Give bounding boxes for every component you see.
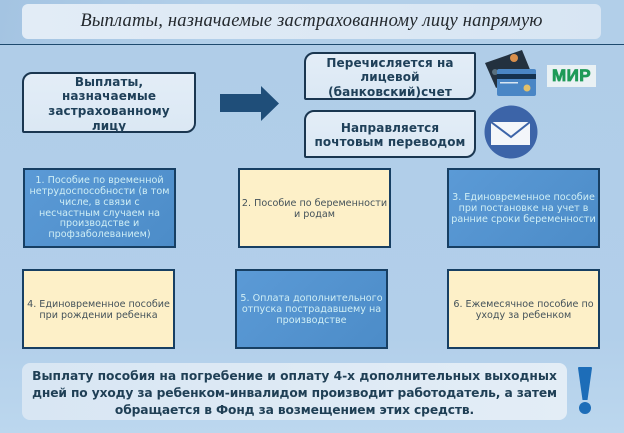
title panel: Выплаты, назначаемые застрахованному лицу напрямую — [80, 11, 543, 31]
left box: payments to insured — [22, 72, 196, 133]
icon: MIR logo — [547, 65, 596, 87]
box: bank account — [304, 52, 476, 100]
benefit 1: производстве и — [60, 218, 139, 229]
left box: payments to insured: лицу — [92, 119, 126, 133]
benefit 1: числе, в связи с — [59, 197, 140, 208]
benefit 6: 6. Ежемесячное пособие по — [453, 299, 594, 310]
benefit 6: уходу за ребенком — [476, 310, 571, 320]
icon: MIR logo: МИР — [552, 66, 591, 85]
benefit 5: отпуска пострадавшему на — [242, 304, 381, 315]
benefit 2: 2. Пособие по беременности — [242, 198, 387, 209]
benefit 4 — [22, 269, 175, 349]
benefit 1: несчастным случаем на — [39, 208, 160, 218]
bottom note panel: дней по уходу за ребенком-инвалидом производит работодатель, а затем — [32, 386, 557, 400]
arrow — [220, 86, 279, 121]
benefit 1: нетрудоспособности (в том — [30, 186, 169, 197]
benefit 3: 3. Единовременное пособие — [452, 192, 595, 203]
benefit 4: при рождении ребенка — [39, 310, 158, 320]
box: bank account: лицевой — [360, 70, 420, 84]
benefit 5: производстве — [276, 315, 347, 326]
bottom note panel: обращается в Фонд за возмещением этих средств. — [115, 403, 474, 417]
icon: bank cards — [485, 50, 536, 96]
benefit 1: 1. Пособие по временной — [35, 175, 164, 186]
box: postal transfer — [304, 110, 476, 158]
benefit 3: ранние сроки беременности — [451, 214, 596, 225]
benefit 2: и родам — [294, 208, 335, 220]
benefit 6 — [447, 269, 600, 349]
title panel — [22, 4, 601, 39]
bottom note panel — [22, 363, 567, 420]
benefit 1: профзаболеванием) — [48, 229, 151, 240]
benefit 5: 5. Оплата дополнительного — [240, 293, 383, 304]
benefit 3 — [447, 168, 600, 248]
box: postal transfer: почтовым переводом — [315, 135, 465, 149]
benefit 2 — [238, 168, 391, 248]
benefit 3: при постановке на учет в — [459, 203, 588, 214]
benefit 1 — [23, 168, 176, 248]
icon: exclamation mark — [578, 367, 592, 414]
benefit 5 — [235, 269, 388, 349]
header divider — [0, 44, 624, 45]
box: bank account: (банковский)счет — [328, 85, 452, 99]
icon: envelope — [484, 106, 538, 158]
box: bank account: Перечисляется на — [326, 56, 454, 70]
bottom note panel: Выплату пособия на погребение и оплату 4-х дополнительных выходных — [32, 369, 557, 383]
left box: payments to insured: Выплаты, — [75, 74, 143, 88]
benefit 4: 4. Единовременное пособие — [27, 299, 170, 310]
left box: payments to insured: застрахованному — [48, 104, 170, 118]
left box: payments to insured: назначаемые — [62, 89, 156, 103]
box: postal transfer: Направляется — [341, 120, 439, 134]
